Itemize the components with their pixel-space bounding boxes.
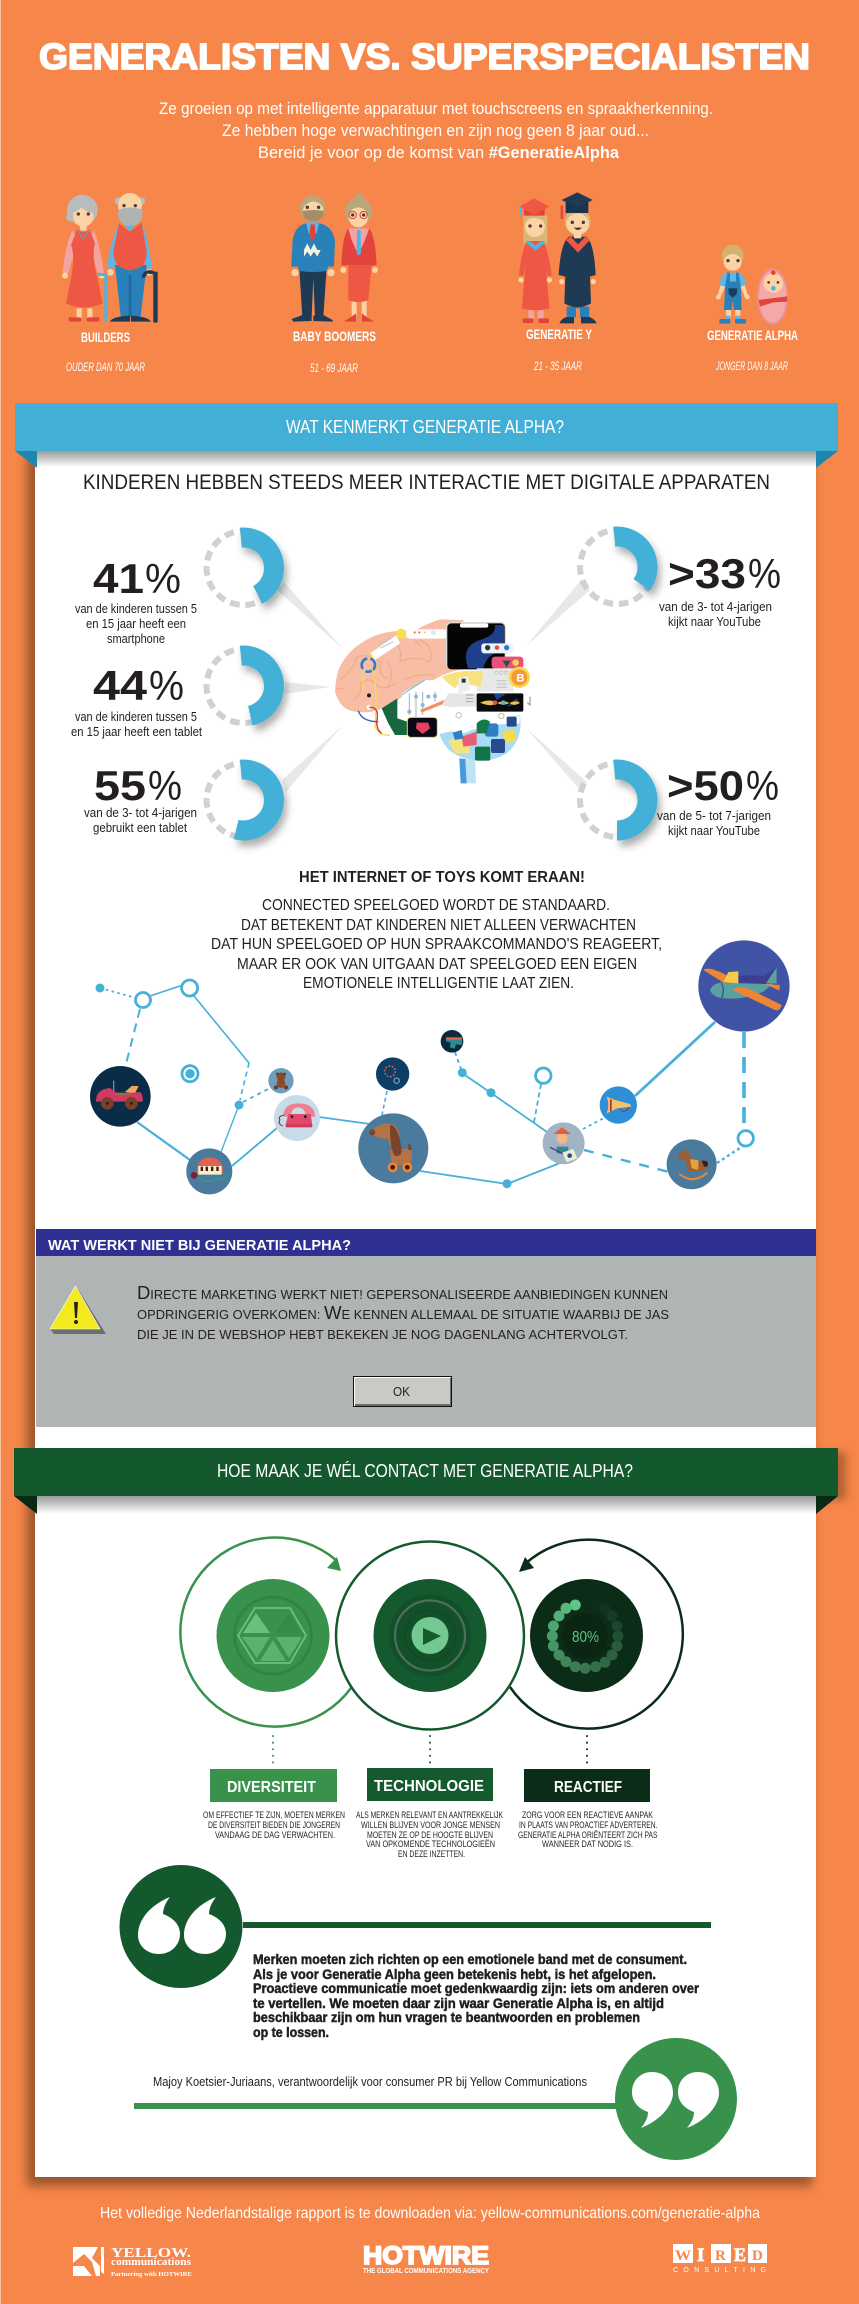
logo: wired consulting: R <box>715 2248 726 2264</box>
cycle diagram <box>180 1538 683 1763</box>
stat: 41 percent: 41 <box>93 555 144 602</box>
ribbon folds <box>14 1496 838 1514</box>
text: internet of toys explanation: EMOTIONELE INTELLIGENTIE LAAT ZIEN. <box>303 975 574 992</box>
text: internet of toys explanation: DAT HUN SPEELGOED OP HUN SPRAAKCOMMANDO'S REAGEERT, <box>211 936 662 953</box>
stat: more than 33 percent: % <box>748 550 781 597</box>
graduate woman <box>518 198 552 323</box>
stat: more than 33 percent: >33 <box>668 550 746 597</box>
column: diversiteit: OM EFFECTIEF TE ZIJN, MOETEN MERKEN <box>203 1810 345 1820</box>
stat: 44 percent: % <box>149 662 184 709</box>
donut chart <box>580 530 654 604</box>
title: GENERALISTEN VS. SUPERSPECIALISTEN <box>39 36 810 77</box>
donut chart <box>580 763 654 837</box>
toy: car <box>90 1066 151 1127</box>
quote text: Merken moeten zich richten op een emotionele band met de consument. <box>253 1951 687 1967</box>
dialog title: WAT WERKT NIET BIJ GENERATIE ALPHA? <box>48 1238 351 1254</box>
graduate man <box>559 192 597 323</box>
dotted connectors <box>273 1736 587 1763</box>
stat: 41 percent: smartphone <box>107 631 165 646</box>
logo mark <box>73 2247 104 2276</box>
left circle arc <box>180 1538 351 1727</box>
logo: wired consulting: E <box>734 2245 746 2266</box>
circuit board <box>382 698 407 735</box>
toy network <box>90 940 790 1194</box>
column: technologie: EN DEZE INZETTEN. <box>398 1849 465 1859</box>
stat: more than 50 percent <box>580 762 779 838</box>
quote text: Als je voor Generatie Alpha geen betekenis hebt, is het afgelopen. <box>253 1966 656 1982</box>
phone <box>446 622 506 669</box>
stat: 44 percent: van de kinderen tussen 5 <box>75 709 197 724</box>
dialog body <box>36 1256 816 1427</box>
brain stem <box>459 758 476 783</box>
column: technologie: VAN OPKOMENDE TECHNOLOGIEËN <box>366 1839 495 1849</box>
toy: telephone <box>274 1095 320 1141</box>
watch <box>407 717 437 737</box>
stat: more than 50 percent: >50 <box>667 762 744 809</box>
text: internet of toys explanation: MAAR ER OOK VAN UITGAAN DAT SPEELGOED EEN EIGEN <box>237 956 637 973</box>
logo: wired consulting: W <box>675 2248 691 2264</box>
illustration: baby boomers couple <box>291 193 378 322</box>
OK button: OK <box>393 1384 410 1399</box>
woman <box>340 193 378 322</box>
quote text: op te lossen. <box>253 2024 329 2040</box>
toy: piano <box>186 1148 232 1194</box>
donut chart <box>206 531 280 605</box>
label: builders: BUILDERS <box>81 329 130 345</box>
quote text: te vertellen. We moeten daar zijn waar Generatie Alpha is, en altijd <box>253 1995 664 2011</box>
logo: wired consulting: D <box>752 2248 763 2264</box>
footer download note: Het volledige Nederlandstalige rapport is te downloaden via: yellow-communications.com/generatie-alpha <box>100 2205 760 2222</box>
banner: wat kenmerkt generatie alpha: WAT KENMERKT GENERATIE ALPHA? <box>286 417 564 437</box>
small nodes <box>96 984 512 1188</box>
label: baby boomers: BABY BOOMERS <box>293 328 376 344</box>
banner: wat kenmerkt generatie alpha <box>15 403 838 468</box>
intro text <box>159 99 713 162</box>
label: generatie alpha <box>707 327 798 373</box>
stat: 41 percent: van de kinderen tussen 5 <box>75 601 197 616</box>
label: generatie alpha: JONGER DAN 8 JAAR <box>715 359 788 373</box>
toy: dog <box>358 1113 428 1183</box>
label: generatie y: 21 - 35 JAAR <box>533 359 582 373</box>
quote text <box>253 1951 700 2040</box>
icon: reactief progress <box>530 1579 643 1692</box>
icon: reactief progress: 80% <box>572 1629 599 1646</box>
banner: hoe maak je wel contact <box>14 1448 846 1514</box>
label: generatie y <box>526 326 592 373</box>
toy: gun <box>441 1030 463 1053</box>
toy: jack in the box <box>543 1122 585 1164</box>
dialog message: DIRECTE MARKETING WERKT NIET! GEPERSONALISEERDE AANBIEDINGEN KUNNEN <box>137 1283 668 1303</box>
column: diversiteit <box>203 1769 345 1840</box>
toolbar <box>406 629 448 639</box>
stat: more than 50 percent: van de 5- tot 7-jarigen <box>657 808 771 823</box>
dialog: wat werkt niet <box>36 1229 816 1427</box>
illustration: generation alpha children <box>716 245 788 325</box>
connecting lines <box>100 985 744 1184</box>
stat: 44 percent: en 15 jaar heeft een tablet <box>71 724 202 739</box>
middle circle ring <box>336 1542 524 1730</box>
label: builders <box>66 329 145 374</box>
yellow hair <box>442 671 483 688</box>
dialog message: DIE JE IN DE WEBSHOP HEBT BEKEKEN JE NOG DAGENLANG ACHTERVOLGT. <box>137 1328 628 1342</box>
column: reactief: WANNEER DAT NODIG IS. <box>542 1839 633 1849</box>
label: baby boomers <box>293 328 376 375</box>
attribution: Majoy Koetsier-Juriaans, verantwoordelijk voor consumer PR bij Yellow Communications <box>153 2074 587 2089</box>
white content panel <box>27 451 816 2186</box>
text: internet of toys explanation <box>211 897 662 992</box>
logo: wired consulting: I <box>697 2245 704 2266</box>
toy: plane <box>698 940 790 1032</box>
text: internet of toys explanation: DAT BETEKENT DAT KINDEREN NIET ALLEEN VERWACHTEN <box>241 917 636 934</box>
man <box>291 196 335 322</box>
voice assistant screen <box>477 693 523 712</box>
heading: kinderen hebben steeds meer interactie: KINDEREN HEBBEN STEEDS MEER INTERACTIE MET DIGITALE APPARATEN <box>83 471 770 494</box>
connector wedges to the brain <box>277 580 590 792</box>
ribbon folds <box>15 451 838 468</box>
logo: hotwire: HOTWIRE <box>363 2242 489 2270</box>
quote text: Proactieve communicatie moet gedenkwaardig zijn: iets om anderen over <box>253 1980 700 1996</box>
stat: 55 percent: gebruikt een tablet <box>93 820 187 835</box>
toy: trumpet <box>600 1086 637 1124</box>
chip and bitcoin <box>477 668 513 692</box>
column: diversiteit: DIVERSITEIT <box>227 1779 316 1796</box>
OK button <box>353 1376 452 1407</box>
stat: 55 percent: 55 <box>94 762 146 809</box>
icon: diversiteit hexagon <box>216 1579 330 1692</box>
toy: teddy bear <box>268 1068 294 1093</box>
dialog message <box>137 1283 669 1342</box>
label: baby boomers: 51 - 69 JAAR <box>310 361 358 375</box>
logo: yellow communications: Partnering with HOTWIRE <box>111 2271 192 2278</box>
quote <box>120 1865 737 2160</box>
chat bubbles <box>481 643 513 653</box>
banner: hoe maak je wel contact: HOE MAAK JE WÉL CONTACT MET GENERATIE ALPHA? <box>217 1461 633 1481</box>
stat: 41 percent <box>75 531 280 646</box>
brain tissue <box>335 619 467 712</box>
right circle arc <box>510 1540 683 1729</box>
icon: warning triangle <box>50 1286 106 1334</box>
stat: 41 percent: en 15 jaar heeft een <box>86 616 186 631</box>
column: reactief: ZORG VOOR EEN REACTIEVE AANPAK <box>522 1810 653 1820</box>
column: diversiteit: DE DIVERSITEIT BIEDEN DIE JONGEREN <box>208 1820 340 1830</box>
column: diversiteit: VANDAAG DE DAG VERWACHTEN. <box>215 1830 335 1840</box>
stat: 55 percent: % <box>148 762 182 809</box>
illustration: generation Y couple <box>518 192 597 323</box>
donut chart <box>206 763 280 837</box>
column: reactief: IN PLAATS VAN PROACTIEF ADVERTEREN. <box>519 1820 658 1830</box>
label: generatie alpha: GENERATIE ALPHA <box>707 327 798 343</box>
logo: hotwire: THE GLOBAL COMMUNICATIONS AGENCY <box>363 2268 489 2275</box>
intro text: Bereid je voor op de komst van #GeneratieAlpha <box>258 143 620 162</box>
quote text: beschikbaar zijn om hun vragen te beantwoorden en problemen <box>253 2009 640 2025</box>
mixer panel <box>402 680 445 722</box>
text: internet of toys explanation: CONNECTED SPEELGOED WORDT DE STANDAARD. <box>262 897 610 914</box>
column: reactief <box>518 1769 658 1849</box>
label: builders: OUDER DAN 70 JAAR <box>66 360 145 374</box>
column: technologie: TECHNOLOGIE <box>374 1778 484 1795</box>
tube and cable <box>370 635 400 660</box>
logo: yellow communications: YELLOW. <box>111 2246 191 2261</box>
stat: 55 percent <box>84 762 280 837</box>
stat: 41 percent: % <box>145 555 181 602</box>
heading: internet of toys: HET INTERNET OF TOYS KOMT ERAAN! <box>299 869 585 886</box>
stat: more than 33 percent: van de 3- tot 4-jarigen <box>659 599 772 614</box>
column: technologie: ALS MERKEN RELEVANT EN AANTREKKELIJK <box>356 1810 503 1820</box>
stat: more than 33 percent <box>580 530 781 629</box>
boy <box>716 245 750 324</box>
baby <box>757 268 788 325</box>
stat: 55 percent: van de 3- tot 4-jarigen <box>84 805 197 820</box>
logo: yellow communications <box>73 2246 192 2278</box>
stat: 44 percent: 44 <box>93 662 148 709</box>
stat: more than 33 percent: kijkt naar YouTube <box>668 614 761 629</box>
donut chart <box>206 649 280 723</box>
illustration: digital brain: B <box>516 673 525 685</box>
stat: more than 50 percent: kijkt naar YouTube <box>668 823 760 838</box>
logo: wired consulting: CONSULTING <box>673 2267 766 2274</box>
stat: more than 50 percent: % <box>746 762 779 809</box>
illustration: digital brain <box>335 619 530 783</box>
toy: rocking horse <box>667 1139 717 1189</box>
intro text: Ze hebben hoge verwachtingen en zijn nog geen 8 jaar oud... <box>222 121 649 140</box>
woman <box>62 195 107 322</box>
column: reactief: GENERATIE ALPHA ORIËNTEERT ZICH PAS <box>518 1830 658 1840</box>
logo: yellow communications: communications <box>111 2257 191 2268</box>
column: technologie <box>356 1768 503 1859</box>
column: reactief: REACTIEF <box>554 1779 622 1796</box>
toy: bead ring <box>376 1057 409 1091</box>
column: technologie: MOETEN ZE OP DE HOOGTE BLIJVEN <box>367 1830 493 1840</box>
label: generatie y: GENERATIE Y <box>526 326 592 342</box>
logo: wired consulting <box>673 2244 767 2274</box>
banner shadow <box>800 1452 846 1500</box>
dialog message: OPDRINGERIG OVERKOMEN: WE KENNEN ALLEMAAL DE SITUATIE WAARBIJ DE JAS <box>137 1303 669 1323</box>
app icons <box>439 715 521 761</box>
intro text: Ze groeien op met intelligente apparatuur met touchscreens en spraakherkenning. <box>159 99 713 118</box>
icon: technologie play button <box>374 1579 486 1692</box>
ring nodes <box>136 980 753 1146</box>
opening quote mark <box>120 1865 711 1988</box>
closing quote mark <box>134 2038 737 2160</box>
man <box>107 193 158 323</box>
dialog title bar <box>36 1229 816 1256</box>
column: technologie: WILLEN BLIJVEN VOOR JONGE MENSEN <box>361 1820 500 1830</box>
illustration: builders couple <box>62 193 158 323</box>
stat: 44 percent <box>71 649 280 739</box>
